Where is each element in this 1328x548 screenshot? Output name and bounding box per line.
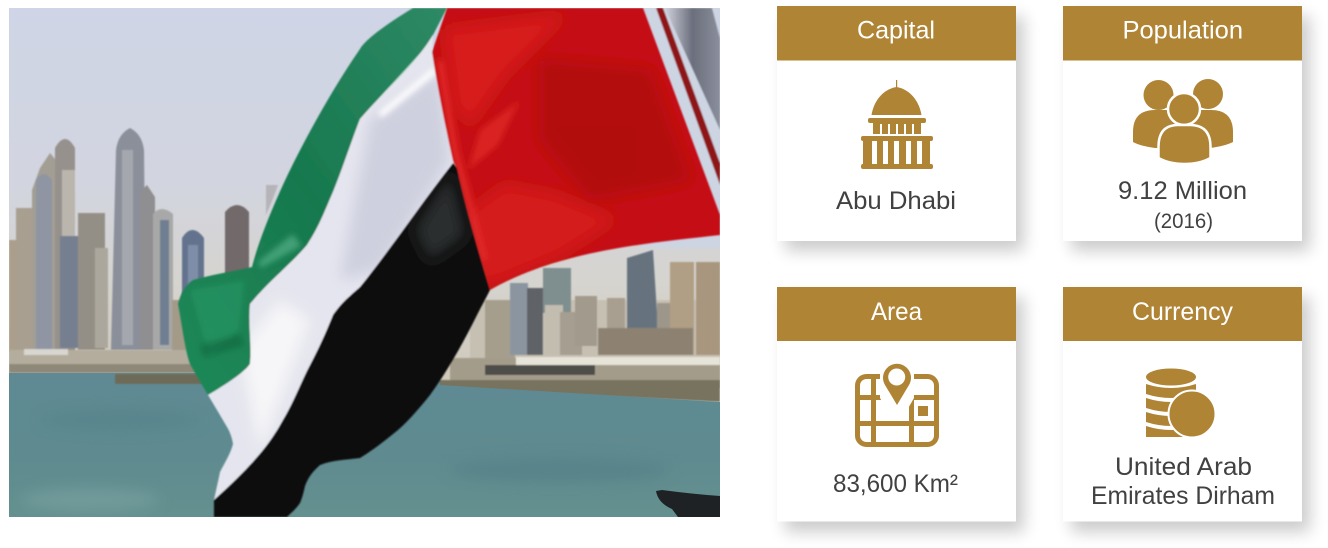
- black band: [210, 150, 500, 520]
- heading: Population: Population: [1122, 16, 1243, 44]
- flag: [170, 0, 725, 520]
- shoreline and jetty: [9, 349, 720, 402]
- water: [9, 373, 720, 517]
- icon: stack of coins: [1146, 368, 1216, 438]
- card: Currency: [1063, 287, 1310, 532]
- jetty rocks: [115, 374, 205, 384]
- card: Population: [1063, 6, 1310, 251]
- heading: Currency: Currency: [1132, 298, 1233, 326]
- water ripples: [30, 468, 616, 510]
- value note: 2016: (2016): [1154, 210, 1213, 233]
- boat: [656, 490, 720, 517]
- skyline right: [470, 250, 720, 360]
- value: Emirates Dirham: Emirates Dirham: [1091, 482, 1275, 510]
- value: 83,600 Km2: 83,600 Km²: [833, 470, 958, 498]
- card: Capital: [777, 6, 1024, 251]
- icon: map with location pin: [857, 364, 937, 446]
- value: United Arab: United Arab: [1115, 453, 1252, 481]
- icon: domed capitol building: [861, 80, 933, 169]
- card: Area: [777, 287, 1024, 532]
- photo: UAE flag over the Dubai skyline: [9, 0, 725, 520]
- white band: [207, 34, 454, 501]
- green band: [170, 0, 460, 400]
- skyline left: [9, 128, 278, 355]
- value: Abu Dhabi: Abu Dhabi: [836, 187, 956, 215]
- heading: Capital: Capital: [857, 16, 935, 44]
- icon: group of people: [1133, 79, 1233, 164]
- red band: [425, 0, 725, 300]
- sky: [9, 8, 720, 388]
- flag pole: [640, 8, 720, 248]
- value: 9.12 Million: 9.12 Million: [1118, 177, 1247, 205]
- heading: Area: Area: [871, 298, 922, 326]
